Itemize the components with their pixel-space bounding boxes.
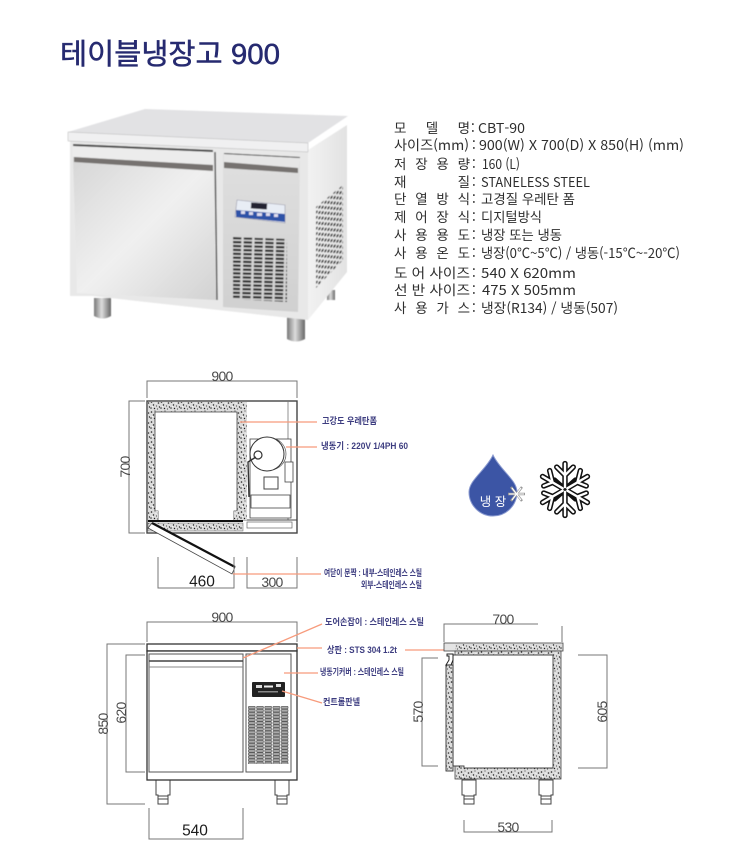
dimension: 300 xyxy=(247,557,297,590)
spec: size: 사이즈(mm) xyxy=(394,134,469,154)
spec: model xyxy=(394,117,525,137)
dimension: width 900 xyxy=(147,609,297,642)
machine panel xyxy=(223,153,300,312)
dimension: 460: 460 xyxy=(189,574,215,590)
callout: door material xyxy=(233,567,422,590)
dimension: 460 xyxy=(158,557,234,590)
spec: gas: 사 용 가 스 xyxy=(394,297,470,317)
spec: usage: 사 용 용 도 xyxy=(394,224,470,244)
top plate insulation xyxy=(455,644,562,650)
panel handle xyxy=(224,154,300,172)
spec: model: 모 델 명 xyxy=(394,117,470,137)
dimension: width 900: 900 xyxy=(211,368,234,384)
callout: compressor xyxy=(286,440,408,451)
table front edge xyxy=(68,132,308,152)
dimension: height 850 xyxy=(95,644,145,804)
inner cavity xyxy=(453,655,553,768)
spec: capacity: 160 (L) xyxy=(482,153,520,173)
spec: control: 제 어 장 식 xyxy=(394,206,470,226)
spec: insulation: : xyxy=(472,188,476,208)
icon: snowflake xyxy=(543,464,587,515)
callout: door material: 외부-스테인레스 스틸 xyxy=(361,579,422,590)
callout: insulation xyxy=(240,415,377,426)
dimension: door height 620: 620 xyxy=(113,701,129,724)
control panel xyxy=(235,200,285,223)
plan view drawing xyxy=(117,368,422,590)
dimension: depth 700 xyxy=(117,401,145,533)
spec: door size: : xyxy=(472,262,476,282)
dimension: width 900 xyxy=(147,368,297,398)
dimension: height 850: 850 xyxy=(95,712,111,735)
side section drawing xyxy=(410,611,610,835)
spec: usage: : xyxy=(472,224,476,244)
spec: shelf size xyxy=(394,279,576,299)
callout: control panel: 컨트롤판넬 xyxy=(323,696,360,707)
spec: insulation: 단 열 방 식 xyxy=(394,188,470,208)
spec: gas xyxy=(394,297,618,317)
callout: machine cover: 냉동기커버 : 스테인레스 스틸 xyxy=(320,666,404,677)
spec: usage: 냉장 또는 냉동 xyxy=(481,224,562,244)
door xyxy=(73,157,216,300)
dimension: door height 620 xyxy=(113,655,145,772)
callout: door handle: 도어손잡이 : 스테인레스 스틸 xyxy=(325,616,424,627)
insulation xyxy=(148,402,247,521)
spec: material: STANELESS STEEL xyxy=(481,171,590,191)
callout: insulation: 고강도 우레탄폼 xyxy=(322,415,377,426)
front vents xyxy=(233,237,287,302)
spec: shelf size: : xyxy=(472,279,476,299)
spec: size: 900(W) X 700(D) X 850(H) (mm) xyxy=(479,134,684,154)
spec: capacity xyxy=(394,153,520,173)
spec: temperature: 사 용 온 도 xyxy=(394,242,470,262)
spec: material: 재 질 xyxy=(394,171,470,191)
dimension: interior 605: 605 xyxy=(594,700,610,723)
side perforations xyxy=(316,185,343,288)
insulation lugs xyxy=(148,511,247,520)
front view drawing xyxy=(95,609,449,840)
icon: refrigeration water drop xyxy=(469,455,525,516)
spec: control xyxy=(394,206,542,226)
vent grille xyxy=(248,706,289,764)
body insulation xyxy=(455,651,561,779)
dimension: 530: 530 xyxy=(497,819,520,835)
spec: shelf size: 선 반 사이즈 xyxy=(394,279,470,299)
dimension: door width 540: 540 xyxy=(182,822,208,840)
feet xyxy=(462,780,553,804)
door xyxy=(149,654,243,772)
spec: temperature: : xyxy=(472,242,476,262)
door section xyxy=(446,665,453,771)
insulation bottom strip xyxy=(148,523,243,531)
spec: control: : xyxy=(472,206,476,226)
spec: door size: 도 어 사이즈 xyxy=(394,262,470,282)
back foot xyxy=(327,290,335,300)
door closed line xyxy=(148,520,243,522)
dimension: door 570: 570 xyxy=(410,700,426,723)
door handle profile xyxy=(446,654,453,665)
feet xyxy=(156,780,289,804)
callout: door material: 여닫이 문짝 : 내부-스테인레스 스틸 xyxy=(324,567,422,578)
spec: control: 디지털방식 xyxy=(481,206,542,226)
specification list xyxy=(394,117,684,317)
spec: material: : xyxy=(472,171,476,191)
front left foot xyxy=(94,298,111,318)
spec: capacity: : xyxy=(472,153,476,173)
door handle shadow xyxy=(74,157,213,171)
spec: insulation: 고경질 우레탄 폼 xyxy=(481,188,575,208)
spec: usage xyxy=(394,224,562,244)
dimension: depth 700: 700 xyxy=(117,455,133,478)
callout: door handle xyxy=(243,616,424,658)
machine panel xyxy=(246,654,291,772)
spec: size: : xyxy=(472,134,476,154)
spec: material xyxy=(394,171,590,191)
front right foot xyxy=(287,315,305,342)
table top xyxy=(68,109,348,143)
dimension: 300: 300 xyxy=(261,574,284,590)
compressor group xyxy=(247,401,297,528)
icon: refrigeration water drop: 냉 장 xyxy=(480,495,507,509)
door gap xyxy=(215,152,217,300)
callout: machine cover xyxy=(284,666,404,677)
spec: capacity: 저 장 용 량 xyxy=(394,153,470,173)
spec: size xyxy=(394,134,684,154)
cabinet xyxy=(147,651,297,780)
door handle xyxy=(73,144,213,166)
spec: gas: 냉장(R134) / 냉동(507) xyxy=(481,297,618,317)
title: 테이블냉장고 900 xyxy=(60,39,280,71)
door swing xyxy=(148,523,235,574)
cabinet front xyxy=(70,140,308,320)
inner cavity xyxy=(148,412,247,520)
spec: temperature: 냉장(0℃~5℃) / 냉동(-15℃~-20℃) xyxy=(481,242,680,262)
spec: model: : xyxy=(471,117,475,137)
dimension: depth 700 xyxy=(444,611,562,642)
spec: gas: : xyxy=(472,297,476,317)
dimension: 530 xyxy=(464,819,552,835)
spec: door size: 540 X 620mm xyxy=(481,262,576,282)
callout: top plate: 상판 : STS 304 1.2t xyxy=(327,644,397,655)
dimension: depth 700: 700 xyxy=(492,611,515,627)
product illustration: table refrigerator xyxy=(68,109,348,342)
callout: control panel xyxy=(282,691,360,707)
control panel xyxy=(252,682,285,697)
cabinet outline xyxy=(147,401,297,533)
spec: shelf size: 475 X 505mm xyxy=(482,279,576,299)
spec: model: CBT-90 xyxy=(478,117,525,137)
callout: compressor: 냉동기 : 220V 1/4PH 60 xyxy=(321,440,408,451)
dimension: door width 540 xyxy=(149,808,243,840)
spec: door size xyxy=(394,262,576,282)
spec: temperature xyxy=(394,242,680,262)
top plate xyxy=(147,644,297,651)
side wall xyxy=(308,125,347,320)
spec: insulation xyxy=(394,188,575,208)
dimension: interior 605 xyxy=(578,655,610,768)
top plate xyxy=(444,643,563,651)
dimension: width 900: 900 xyxy=(211,609,234,625)
dimension: door 570 xyxy=(410,658,438,766)
